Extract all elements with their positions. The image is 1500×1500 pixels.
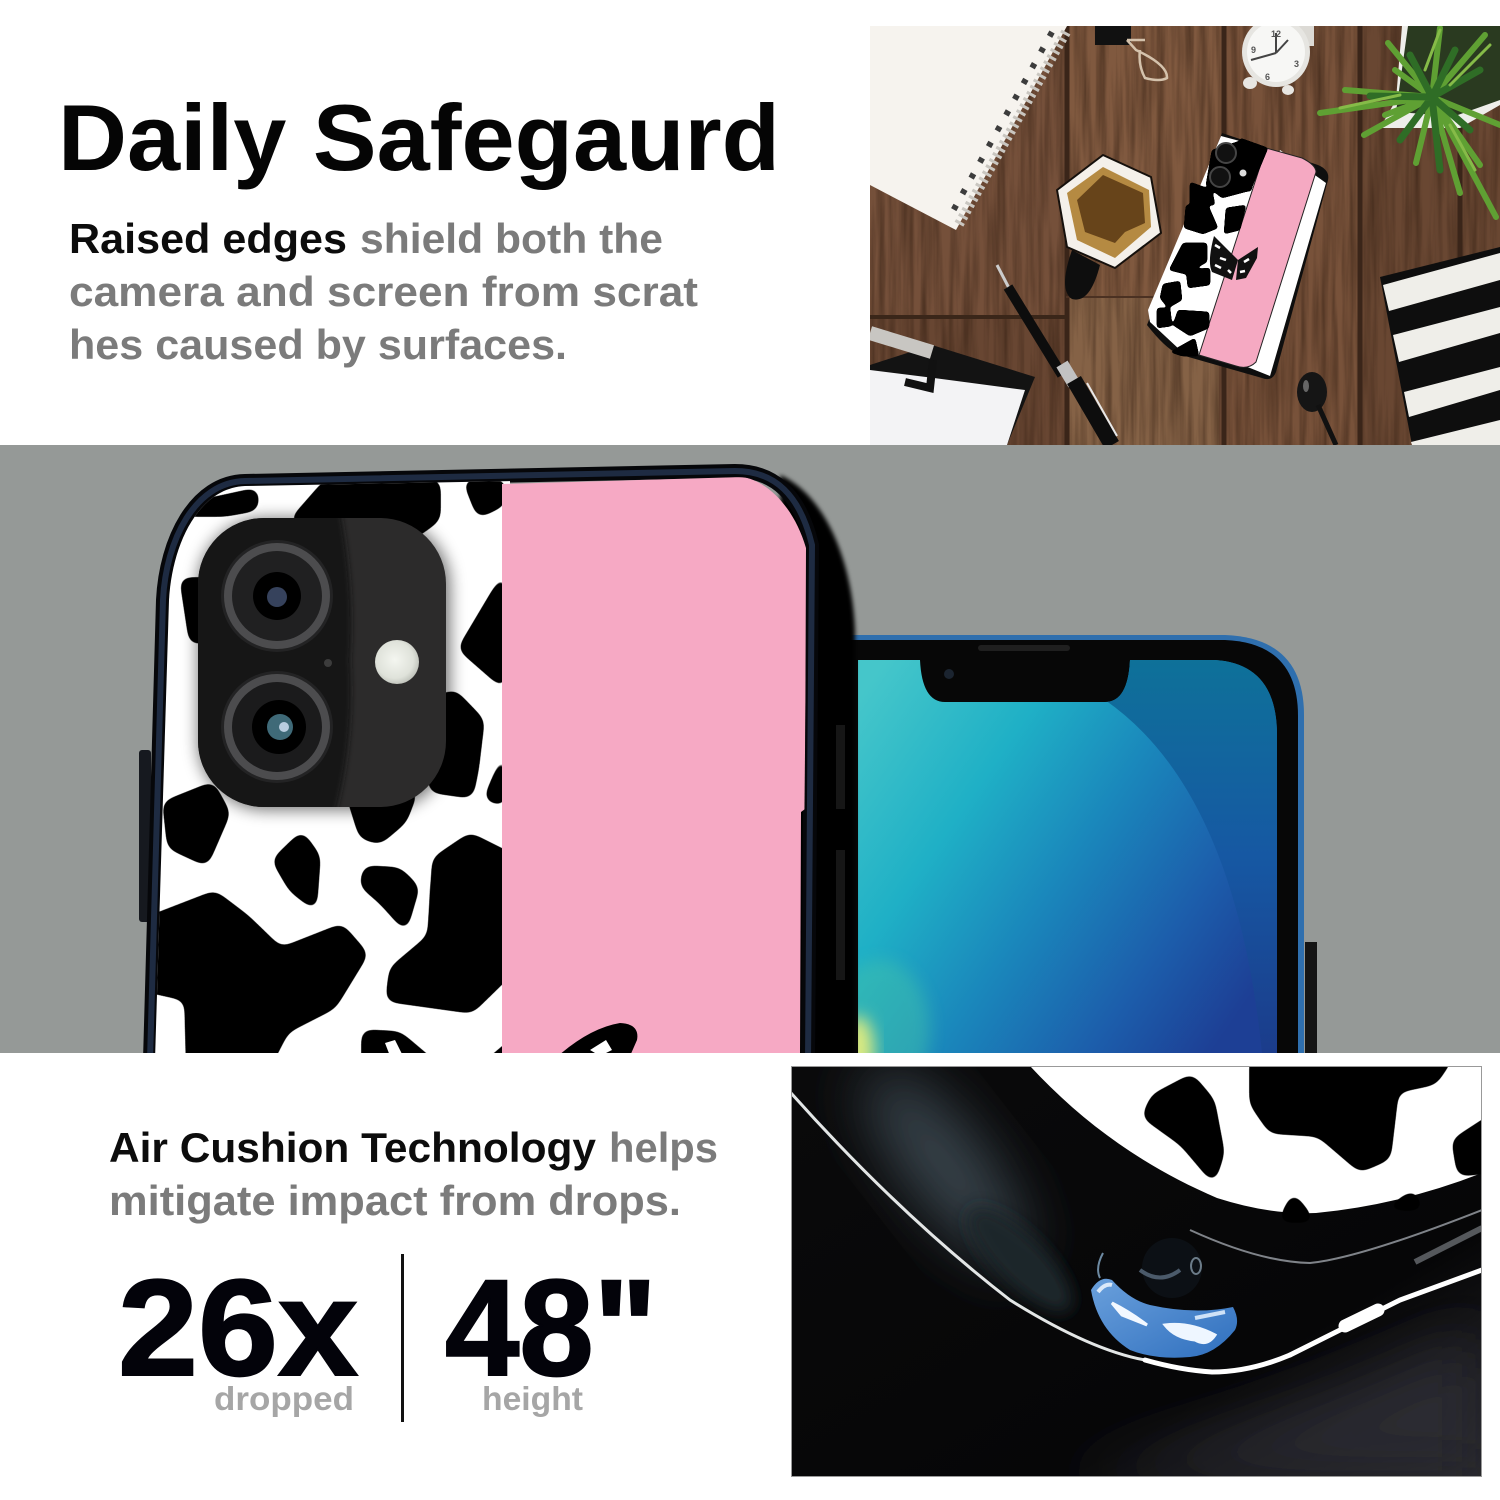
photo: case corner close-up with air cushion bbox=[791, 1047, 1495, 1477]
white rim line bbox=[791, 1093, 1482, 1372]
stat: 48 inch height: 48" bbox=[445, 1252, 657, 1405]
pink half bbox=[502, 477, 806, 1060]
stat: 26x dropped: 26x bbox=[118, 1252, 358, 1405]
pen bbox=[997, 265, 1117, 445]
flash bbox=[375, 640, 419, 684]
alarm clock: 12 bbox=[1271, 29, 1281, 39]
main phone case bbox=[139, 470, 855, 1075]
alarm clock: 6 bbox=[1265, 72, 1270, 82]
text block: air cushion technology: mitigate impact from drops. bbox=[109, 1177, 681, 1224]
paper clip bbox=[1095, 26, 1167, 80]
text block: raised edges: hes caused by surfaces. bbox=[69, 321, 567, 368]
air bubble bbox=[1091, 1238, 1237, 1358]
bumper highlight bbox=[841, 1047, 1049, 1283]
striped notebook bbox=[1380, 247, 1500, 445]
text block: air cushion technology bbox=[109, 1124, 718, 1224]
alarm clock: 3 bbox=[1294, 59, 1299, 69]
grey band: phones bbox=[0, 445, 1500, 1100]
cow print spots bbox=[157, 481, 504, 1053]
lens: upper bbox=[221, 540, 333, 652]
clipboard bbox=[870, 333, 1035, 445]
small phone with case bbox=[1147, 133, 1328, 379]
case inner edge line bbox=[1190, 1210, 1482, 1263]
case back bbox=[140, 470, 806, 1075]
plant bbox=[1320, 26, 1500, 217]
camera module bbox=[190, 510, 450, 815]
cow print corner bbox=[1031, 1067, 1481, 1214]
text block: air cushion technology: Air Cushion Technology bbox=[109, 1124, 597, 1171]
stat: 26x dropped: dropped bbox=[214, 1380, 354, 1417]
text block: raised edges: Raised edges bbox=[69, 215, 347, 262]
text block: raised edges bbox=[69, 215, 698, 368]
text block: raised edges: camera and screen from scrat bbox=[69, 268, 698, 315]
small cow spots bbox=[1157, 138, 1268, 356]
phone: front view with screen bbox=[852, 635, 1317, 1053]
butterfly wing tip bbox=[562, 1023, 638, 1053]
text block: air cushion technology: helps bbox=[609, 1124, 718, 1171]
butterfly bbox=[1210, 236, 1258, 280]
text block: raised edges: shield both the bbox=[360, 215, 663, 262]
lens: lower bbox=[221, 671, 333, 783]
title: Daily Safegaurd bbox=[58, 85, 780, 190]
phone screen bbox=[858, 660, 1277, 1053]
alarm clock: 9 bbox=[1251, 45, 1256, 55]
butterfly outline inset bbox=[385, 1040, 402, 1053]
notebook bbox=[870, 26, 1067, 230]
coffee cup bbox=[1057, 155, 1161, 300]
stat: 48 inch height: height bbox=[482, 1380, 583, 1417]
alarm clock bbox=[1242, 26, 1314, 95]
spoon bbox=[1297, 372, 1336, 445]
photo: phone on wooden desk bbox=[870, 17, 1500, 445]
